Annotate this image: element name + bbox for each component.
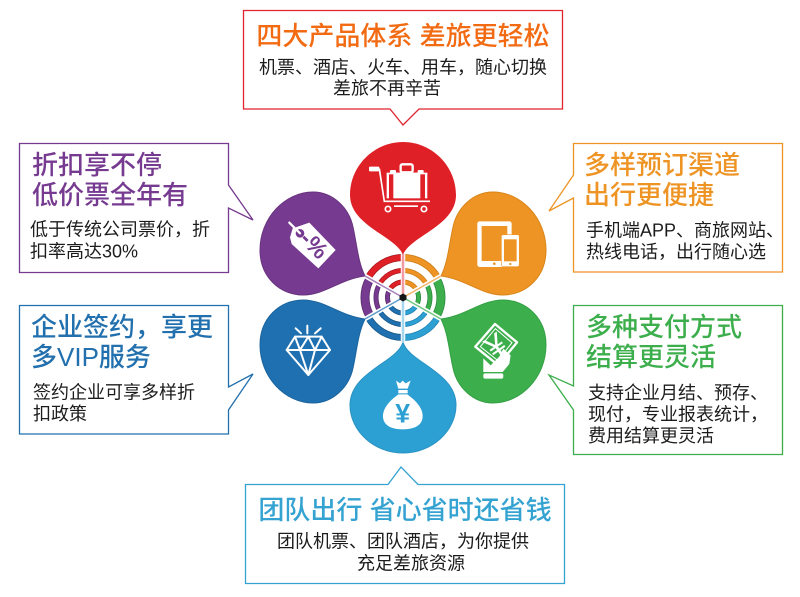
callout: top product system (244, 10, 562, 125)
petal: purple discount tag (260, 192, 365, 295)
callout: enterprise contract: 企业签约，享更 (31, 307, 213, 344)
icon: hand holding card: ¥ (477, 326, 514, 366)
callout: payment methods: 支持企业月结、预存、 (588, 383, 768, 403)
callout: payment methods: 现付，专业报表统计， (588, 400, 768, 426)
ring: purple sector (351, 246, 455, 349)
icon: price tag: -% (295, 225, 334, 264)
callout: team travel: 团队出行 省心省时还省钱 (258, 495, 552, 525)
callout: enterprise contract: 签约企业可享多样折 (33, 382, 195, 402)
callout: top product system: 差旅不再辛苦 (333, 78, 441, 98)
callout: payment methods (549, 306, 782, 454)
callout: discounts: 折扣享不停 (32, 150, 162, 180)
icon: tablet and phone (477, 221, 519, 267)
callout: booking channels (549, 144, 784, 272)
callout: team travel: 充足差旅资源 (357, 554, 465, 574)
callout: enterprise contract: 多VIP服务 (31, 342, 151, 372)
ring: green sector (351, 246, 455, 349)
petal: red luggage cart (350, 142, 456, 255)
callout: booking channels: 手机端APP、商旅网站、 (586, 220, 784, 240)
petal: orange devices (441, 192, 546, 295)
callout: enterprise contract (20, 306, 253, 434)
callout: booking channels: 出行更便捷 (584, 180, 714, 210)
callout: discounts: 低于传统公司票价，折 (30, 216, 210, 242)
icon: luggage cart (369, 164, 430, 212)
callout: discounts: 低价票全年有 (32, 180, 188, 210)
ring: red sector (349, 243, 457, 352)
icon: diamond (287, 326, 330, 375)
callout: top product system: 四大产品体系 差旅更轻松 (256, 21, 550, 51)
callout: booking channels: 热线电话，出行随心选 (586, 238, 766, 264)
callout: payment methods: 费用结算更灵活 (588, 426, 714, 446)
ring: light blue sector (349, 243, 457, 352)
callout: discounts: 扣率高达30% (30, 242, 138, 262)
callout: team travel (246, 467, 564, 584)
callout: top product system: 机票、酒店、火车、用车，随心切换 (259, 54, 547, 80)
ring: orange sector (363, 258, 443, 338)
callout: booking channels: 多样预订渠道 (584, 150, 740, 180)
center hub (400, 294, 406, 302)
petal: dark blue diamond (260, 300, 365, 403)
petal: green payment (441, 300, 546, 403)
callout: enterprise contract: 扣政策 (33, 404, 87, 424)
callout: payment methods: 多种支付方式 (586, 312, 742, 342)
callout: payment methods: 结算更灵活 (586, 342, 716, 372)
spokes linking rings to petals (365, 254, 441, 343)
callout: discounts (20, 144, 253, 272)
callout: team travel: 团队机票、团队酒店，为你提供 (277, 528, 529, 554)
petal: light blue money bag (350, 342, 456, 453)
center ring target (349, 243, 457, 352)
icon: money bag: ¥ (395, 398, 410, 428)
ring: dark blue sector (363, 258, 443, 338)
